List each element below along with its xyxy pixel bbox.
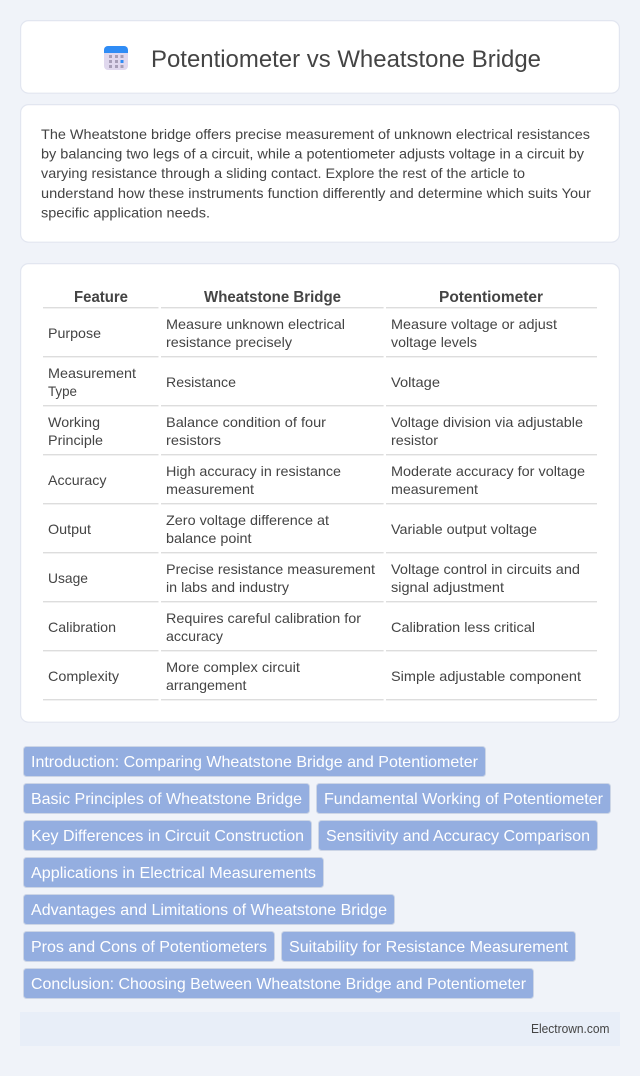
row: purpose: Measure voltage or adjust bbox=[391, 316, 557, 332]
row: calibration: Requires careful calibration for bbox=[166, 610, 361, 626]
row: accuracy: High accuracy in resistance bbox=[166, 463, 341, 479]
row: complexity: arrangement bbox=[166, 677, 247, 693]
tag: sensitivity and accuracy: Sensitivity and Accuracy Comparison bbox=[326, 828, 590, 845]
row: output bbox=[48, 512, 537, 546]
row: purpose: Measure unknown electrical bbox=[166, 316, 345, 332]
row: accuracy bbox=[48, 463, 585, 497]
panel: introduction bbox=[21, 105, 619, 242]
row: measurement type: Measurement bbox=[48, 365, 136, 381]
row: measurement type: Resistance bbox=[166, 374, 236, 390]
row: calibration: accuracy bbox=[166, 628, 223, 644]
tag: fundamental working bbox=[316, 784, 610, 814]
row: accuracy: measurement bbox=[391, 481, 478, 497]
row: complexity: Simple adjustable component bbox=[391, 668, 581, 684]
row: usage: in labs and industry bbox=[166, 579, 289, 595]
row: output: balance point bbox=[166, 530, 252, 546]
row: accuracy: measurement bbox=[166, 481, 254, 497]
row: measurement type: Voltage bbox=[391, 374, 440, 390]
tag: introduction: Introduction: Comparing Wheatstone Bridge and Potentiometer bbox=[31, 754, 479, 771]
row: usage bbox=[48, 561, 580, 595]
row: working principle: Balance condition of four bbox=[166, 414, 326, 430]
table header: Potentiometer bbox=[439, 289, 543, 306]
row: working principle: Voltage division via adjustable bbox=[391, 414, 583, 430]
row: measurement type: Type bbox=[48, 383, 77, 399]
row: purpose: Purpose bbox=[48, 325, 101, 341]
tag: suitability bbox=[282, 932, 576, 962]
row: accuracy: Accuracy bbox=[48, 472, 106, 488]
tag: fundamental working: Fundamental Working of Potentiometer bbox=[324, 791, 604, 808]
tag: advantages and limitations: Advantages and Limitations of Wheatstone Bridge bbox=[31, 902, 387, 919]
row: working principle: Principle bbox=[48, 432, 103, 448]
row: output: Zero voltage difference at bbox=[166, 512, 329, 528]
row: working principle: resistors bbox=[166, 432, 221, 448]
footer bbox=[20, 1012, 620, 1046]
tag: advantages and limitations bbox=[24, 894, 394, 924]
panel: header card bbox=[21, 21, 619, 93]
tag: key differences bbox=[24, 820, 312, 850]
table header: Wheatstone Bridge bbox=[204, 289, 341, 306]
tag: pros and cons: Pros and Cons of Potentiometers bbox=[31, 939, 267, 956]
tag: applications bbox=[24, 858, 324, 888]
tag: basic principles: Basic Principles of Wheatstone Bridge bbox=[31, 791, 302, 808]
table header bbox=[74, 289, 543, 306]
tag: basic principles bbox=[24, 784, 310, 814]
row: working principle bbox=[48, 414, 583, 448]
row: output: Variable output voltage bbox=[391, 521, 537, 537]
row: usage: signal adjustment bbox=[391, 579, 504, 595]
panel: comparison table bbox=[21, 264, 619, 722]
text block: intro paragraph: The Wheatstone bridge offers precise measurement of unknown electrical resistances bbox=[41, 126, 590, 142]
text block: intro paragraph: understand how these instruments function differently and determine which suits Your bbox=[41, 185, 591, 201]
tag: applications: Applications in Electrical Measurements bbox=[31, 865, 316, 882]
row: output: Output bbox=[48, 521, 91, 537]
tag: key differences: Key Differences in Circuit Construction bbox=[31, 828, 304, 845]
row: purpose: voltage levels bbox=[391, 334, 477, 350]
row: complexity bbox=[48, 659, 581, 693]
row: calibration: Calibration less critical bbox=[391, 619, 535, 635]
text block: intro paragraph: varying resistance through a sliding contact. Explore the rest of the article to bbox=[41, 165, 525, 181]
panel: topic tags bbox=[24, 746, 610, 998]
row: purpose: resistance precisely bbox=[166, 334, 292, 350]
row: calibration bbox=[48, 610, 535, 644]
row: accuracy: Moderate accuracy for voltage bbox=[391, 463, 585, 479]
table header: Feature bbox=[74, 289, 128, 306]
tag: suitability: Suitability for Resistance Measurement bbox=[289, 939, 569, 956]
row: calibration: Calibration bbox=[48, 619, 116, 635]
row: complexity: More complex circuit bbox=[166, 659, 300, 675]
row: usage: Usage bbox=[48, 570, 88, 586]
row: purpose bbox=[48, 316, 557, 350]
row: usage: Voltage control in circuits and bbox=[391, 561, 580, 577]
row: measurement type bbox=[48, 365, 440, 399]
tag: pros and cons bbox=[24, 932, 274, 962]
footer: Electrown.com bbox=[531, 1022, 610, 1036]
title: Potentiometer vs Wheatstone Bridge bbox=[151, 46, 541, 73]
row: working principle: Working bbox=[48, 414, 100, 430]
icon: calendar bbox=[104, 46, 128, 70]
row: working principle: resistor bbox=[391, 432, 438, 448]
tag: conclusion: Conclusion: Choosing Between Wheatstone Bridge and Potentiometer bbox=[31, 976, 527, 993]
row: complexity: Complexity bbox=[48, 668, 119, 684]
text block: intro paragraph: by balancing two legs of a circuit, while a potentiometer adjusts voltage in a circuit by bbox=[41, 146, 584, 162]
text block: intro paragraph: specific application needs. bbox=[41, 204, 210, 220]
row: usage: Precise resistance measurement bbox=[166, 561, 375, 577]
text block: intro paragraph bbox=[41, 126, 591, 220]
tag: conclusion bbox=[24, 968, 534, 998]
tag: introduction bbox=[24, 746, 486, 776]
tag: sensitivity and accuracy bbox=[318, 820, 598, 850]
